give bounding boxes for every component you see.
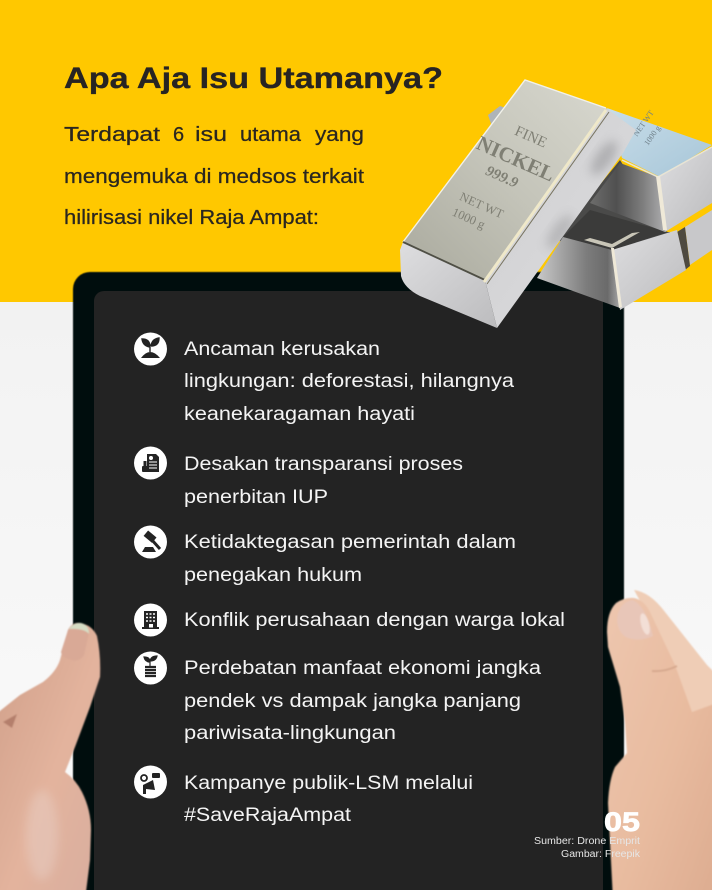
- left nail tip: [69, 623, 89, 634]
- right hand holding tablet: [607, 590, 712, 890]
- left thumb and palm: [0, 623, 100, 890]
- intro paragraph: [64, 124, 364, 229]
- front bar: [400, 80, 636, 328]
- icon: permit document and stamp: [134, 446, 167, 480]
- right thumbnail: [617, 600, 653, 640]
- small engraved label on back bar: NET WT: [631, 109, 656, 138]
- title: Apa Aja Isu Utamanya?: [64, 62, 443, 95]
- text: penerbitan IUP: [184, 487, 328, 508]
- issue 5: economy vs environment debate: [134, 652, 541, 744]
- front bar long side face: [485, 108, 636, 328]
- icon: office building: [134, 604, 167, 636]
- text: Ancaman kerusakan: [184, 339, 380, 360]
- issue 3: law enforcement: [134, 526, 516, 586]
- white lower background: [0, 302, 712, 890]
- right fingers behind the thumb: [634, 590, 712, 720]
- icon: sprout: [134, 332, 167, 366]
- text: [184, 454, 463, 508]
- text: pendek vs dampak jangka panjang: [184, 691, 521, 712]
- engraved bar text: 1000 g: [450, 205, 488, 232]
- icon: megaphone and speech bubble: [134, 766, 167, 798]
- icon: gavel: [134, 526, 167, 558]
- intro paragraph: 6: [173, 124, 184, 146]
- yellow header band: [0, 0, 712, 302]
- intro paragraph: utama: [240, 124, 302, 146]
- engraved bar text: 999.9: [483, 163, 521, 192]
- text: #SaveRajaAmpat: [184, 805, 352, 826]
- issue 4: company vs residents: [134, 604, 565, 636]
- text: [184, 339, 514, 425]
- text: Desakan transparansi proses: [184, 454, 463, 475]
- text: keanekaragaman hayati: [184, 404, 415, 425]
- issue 6: public campaign: [134, 766, 473, 826]
- tablet device: [73, 272, 624, 890]
- upper back bar: [488, 106, 712, 232]
- tablet screen: [94, 291, 603, 890]
- issue 1: environmental damage: [134, 332, 514, 425]
- text: [184, 658, 541, 744]
- text: Perdebatan manfaat ekonomi jangka: [184, 658, 541, 679]
- text: Ketidaktegasan pemerintah dalam: [184, 532, 516, 553]
- intro paragraph: yang: [315, 124, 364, 146]
- page number: 05: [604, 807, 640, 837]
- right thumb and palm: [607, 598, 712, 890]
- engraved bar text: NET WT: [458, 190, 506, 221]
- left webbing shadow: [3, 714, 17, 728]
- lower back bar: [537, 210, 686, 310]
- intro paragraph: mengemuka di medsos terkait: [64, 166, 364, 188]
- engraved bar text: [450, 123, 559, 232]
- text: pariwisata-lingkungan: [184, 723, 396, 744]
- engraved bar text: FINE: [512, 123, 549, 151]
- source credits: Gambar: Freepik: [561, 849, 641, 860]
- left thumbnail: [61, 624, 89, 660]
- front bar top face: [403, 80, 606, 280]
- backing fill between bars: [555, 160, 677, 252]
- intro paragraph: Terdapat: [64, 124, 161, 146]
- upper back bar: 1000 g: [642, 124, 662, 147]
- left palm highlight: [26, 790, 58, 880]
- left hand holding tablet: [0, 623, 100, 890]
- text: Konflik perusahaan dengan warga lokal: [184, 610, 565, 631]
- issue 2: transparency: [134, 446, 463, 508]
- text: [184, 773, 473, 826]
- intro paragraph: hilirisasi nikel Raja Ampat:: [64, 207, 319, 229]
- text: Kampanye publik-LSM melalui: [184, 773, 473, 794]
- text: penegakan hukum: [184, 565, 362, 586]
- tablet bezel: [73, 272, 624, 890]
- nickel bars image: [400, 80, 712, 328]
- icon: sprout on coins: [134, 652, 167, 684]
- source credits: Sumber: Drone Emprit: [534, 836, 640, 847]
- right knuckle crease: [652, 666, 677, 671]
- intro paragraph: isu: [195, 124, 227, 146]
- front bar end face: [400, 242, 497, 328]
- engraved bar text: NICKEL: [473, 131, 559, 186]
- source credits: [534, 836, 641, 860]
- right nail highlight: [638, 612, 652, 636]
- third bar at far right: [677, 210, 712, 270]
- text: [184, 532, 516, 586]
- text: lingkungan: deforestasi, hilangnya: [184, 371, 514, 392]
